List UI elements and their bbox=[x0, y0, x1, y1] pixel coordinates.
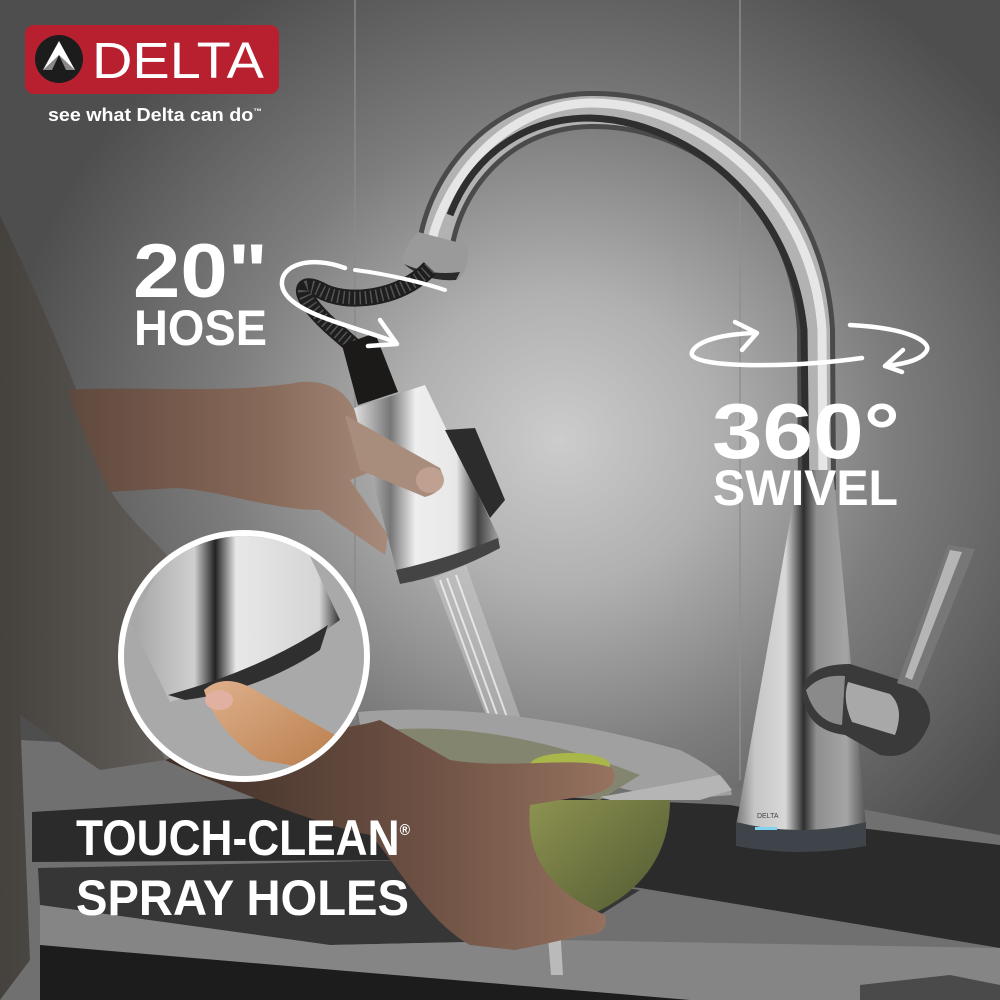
pull-down hose bbox=[304, 268, 430, 350]
faucet: arched spout and body bbox=[402, 103, 975, 852]
icon: delta logo bbox=[35, 35, 83, 83]
thumb bbox=[345, 415, 443, 497]
counter and sink bbox=[0, 740, 1000, 1000]
logo: Delta: ™ bbox=[253, 107, 262, 116]
callout: touch-clean spray holes: SPRAY HOLES bbox=[76, 870, 409, 926]
logo: Delta bbox=[25, 25, 279, 125]
inset circle: touch-clean spray holes bbox=[118, 530, 370, 782]
callout: 360 swivel: SWIVEL bbox=[713, 460, 898, 516]
arrow: 360 swivel bbox=[692, 322, 927, 372]
callout: touch-clean spray holes: TOUCH-CLEAN bbox=[76, 810, 442, 866]
callout: touch-clean spray holes bbox=[76, 810, 410, 926]
faucet base bbox=[736, 470, 866, 843]
callout: 20 inch hose: HOSE bbox=[134, 300, 267, 356]
sweater sleeve bbox=[0, 215, 175, 1000]
upper arm and hand holding spray head bbox=[68, 382, 388, 555]
handle bbox=[802, 664, 930, 756]
callout: 20 inch hose: 20" bbox=[133, 229, 268, 314]
callout: touch-clean spray holes: ® bbox=[400, 822, 410, 839]
callout: 360 swivel: 360° bbox=[712, 387, 900, 475]
logo: Delta: see what Delta can do bbox=[48, 105, 236, 125]
logo: Delta: DELTA bbox=[92, 32, 264, 89]
strainer with green vegetable bbox=[358, 710, 732, 925]
lower arm and hand holding strainer bbox=[165, 720, 614, 950]
spray head bbox=[342, 333, 505, 584]
arrow: hose extension bbox=[282, 262, 445, 346]
callout: 360 swivel bbox=[712, 387, 900, 516]
spray water bbox=[433, 565, 563, 975]
faucet: arched spout and body: DELTA bbox=[757, 813, 779, 820]
callout: 20 inch hose bbox=[133, 229, 268, 356]
